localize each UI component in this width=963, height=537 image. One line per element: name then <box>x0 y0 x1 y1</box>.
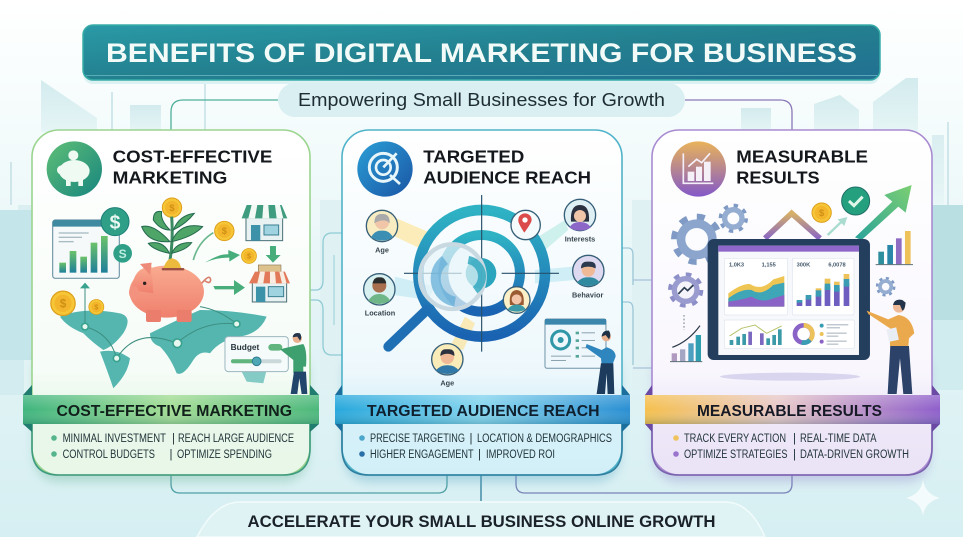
heading: targeted audience reach: AUDIENCE REACH <box>423 167 591 187</box>
benefit list: cost-effective: MINIMAL INVESTMENT <box>63 433 166 445</box>
person pointing <box>586 331 616 394</box>
plant <box>170 217 172 260</box>
donut <box>795 325 812 343</box>
benefit list: cost-effective: OPTIMIZE SPENDING <box>177 449 272 461</box>
heading: cost-effective marketing <box>47 141 273 197</box>
store top <box>242 205 287 241</box>
avatar labels <box>365 234 603 388</box>
benefit list: cost-effective: REACH LARGE AUDIENCE <box>178 433 294 445</box>
growth arrow <box>855 185 912 240</box>
benefit list: cost-effective: CONTROL BUDGETS <box>63 449 155 461</box>
subtitle pill: Empowering Small Businesses for Growth <box>298 90 665 110</box>
budget card <box>225 337 288 372</box>
area chart <box>728 276 784 307</box>
heading: measurable results <box>671 141 868 197</box>
chart window <box>53 220 119 278</box>
panel: measurable results <box>645 130 940 482</box>
ribbon: cost-effective marketing <box>23 385 319 432</box>
benefit list: targeted: PRECISE TARGETING <box>370 433 465 445</box>
benefit list: measurable: TRACK EVERY ACTION <box>684 433 786 445</box>
tablet numbers <box>729 263 846 269</box>
benefit list: measurable: | <box>793 433 796 445</box>
check badge <box>842 187 870 215</box>
connector lines <box>171 100 792 501</box>
beams <box>392 218 575 350</box>
title banner: BENEFITS OF DIGITAL MARKETING FOR BUSINESS <box>106 38 857 68</box>
benefit list: cost-effective <box>51 433 294 461</box>
bars right <box>876 231 913 265</box>
benefit list: measurable: | <box>793 449 796 461</box>
store bottom <box>249 265 290 302</box>
arrows <box>205 246 281 295</box>
avatar labels: Behavior <box>572 291 603 300</box>
avatar labels: Interests <box>565 234 595 243</box>
target rings <box>418 210 545 337</box>
subtitle pill <box>278 83 685 117</box>
avatar labels: Age <box>375 246 389 255</box>
ribbon: measurable results: MEASURABLE RESULTS <box>697 403 882 420</box>
avatar labels: Age <box>440 379 454 388</box>
small bars and line <box>730 329 782 345</box>
ribbon: targeted audience reach: TARGETED AUDIENCE REACH <box>367 403 600 420</box>
illustration: dashboard tablet <box>670 185 914 394</box>
audience avatars <box>364 199 604 375</box>
heading: cost-effective marketing: MARKETING <box>113 167 227 187</box>
illustration: piggy bank, map and stores <box>51 198 307 394</box>
tablet numbers: 1,0K3 <box>729 263 744 269</box>
benefit list: targeted: LOCATION & DEMOGRAPHICS <box>477 433 612 445</box>
world map <box>60 310 267 388</box>
gold coins <box>51 291 75 316</box>
benefit list: targeted: | <box>470 433 472 445</box>
benefit list: targeted: HIGHER ENGAGEMENT <box>370 449 474 461</box>
benefit list: cost-effective: | <box>170 449 172 461</box>
tablet numbers: 300K <box>797 263 811 269</box>
tablet numbers: 6,0078 <box>828 263 846 269</box>
call to action: ACCELERATE YOUR SMALL BUSINESS ONLINE GROWTH <box>248 512 716 531</box>
stacked bars <box>797 283 849 306</box>
benefit list: targeted <box>359 433 612 461</box>
green coins <box>101 208 129 236</box>
illustration: piggy bank, map and stores: S <box>119 247 127 261</box>
budget card: Budget <box>231 342 260 352</box>
ribbon: targeted audience reach <box>335 385 630 432</box>
panel: cost-effective marketing <box>23 130 319 482</box>
illustration: target and audience <box>364 195 616 394</box>
heading: measurable results: MEASURABLE <box>736 147 868 167</box>
call to action <box>197 502 765 537</box>
ribbon: cost-effective marketing: COST-EFFECTIVE MARKETING <box>56 403 292 420</box>
gears <box>670 206 894 306</box>
benefit list: targeted: | <box>478 449 481 461</box>
benefit list: measurable <box>673 433 909 461</box>
ribbon: measurable results <box>645 385 940 432</box>
person with budget <box>280 333 307 394</box>
heading: measurable results: RESULTS <box>736 167 820 187</box>
small chart left <box>670 315 702 362</box>
illustration: piggy bank, map and stores: $ <box>110 213 121 234</box>
chevron <box>765 213 820 238</box>
pig <box>129 258 211 322</box>
tablet <box>708 239 870 360</box>
avatar labels: Location <box>365 308 396 317</box>
small dashboard window <box>545 319 606 368</box>
heading: targeted audience reach: TARGETED <box>423 147 525 167</box>
panel: targeted audience reach <box>335 130 630 482</box>
presenter <box>867 300 914 394</box>
background skyline <box>0 78 963 395</box>
sparkle <box>906 480 940 516</box>
title banner <box>83 25 880 84</box>
benefit list: measurable: REAL-TIME DATA <box>800 433 877 445</box>
tablet numbers: 1,155 <box>762 263 776 269</box>
heading: targeted audience reach <box>357 141 591 197</box>
benefit list: measurable: DATA-DRIVEN GROWTH <box>800 449 909 461</box>
magnifier <box>388 244 485 347</box>
benefit list: cost-effective: | <box>172 433 175 445</box>
benefit list: targeted: IMPROVED ROI <box>486 449 555 461</box>
benefit list: measurable: OPTIMIZE STRATEGIES <box>684 449 788 461</box>
heading: cost-effective marketing: COST-EFFECTIVE <box>113 147 273 167</box>
